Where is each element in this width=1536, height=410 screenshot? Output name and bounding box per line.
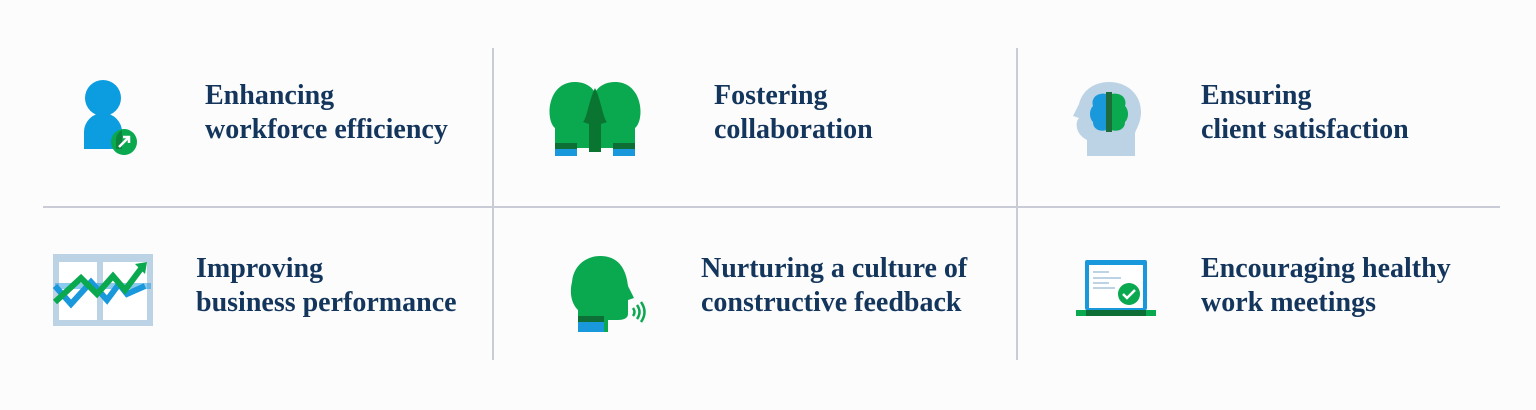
heading: constructive feedback: Nurturing a culture of (701, 253, 967, 284)
heading: constructive feedback (701, 253, 968, 318)
icon: chart (52, 254, 153, 326)
icon: person with arrow (84, 80, 137, 155)
heading: collaboration: collaboration (714, 114, 873, 145)
icon: laptop with check (1076, 260, 1156, 316)
heading: business performance: Improving (196, 253, 323, 284)
heading: collaboration (714, 80, 873, 145)
heading: workforce efficiency (205, 80, 448, 145)
icon: head with brain (1073, 82, 1141, 156)
heading: workforce efficiency: Enhancing (205, 80, 334, 111)
heading: collaboration: Fostering (714, 80, 828, 111)
icon: two heads (550, 82, 640, 156)
heading: client satisfaction: client satisfaction (1201, 114, 1409, 145)
heading: business performance (196, 253, 457, 318)
heading: healthy work meetings: Encouraging healthy (1201, 253, 1451, 284)
heading: constructive feedback: constructive feedback (701, 287, 962, 318)
heading: workforce efficiency: workforce efficiency (205, 114, 448, 145)
icon: speaking head (570, 256, 646, 332)
heading: business performance: business performance (196, 287, 457, 318)
heading: healthy work meetings: work meetings (1201, 287, 1376, 318)
heading: client satisfaction (1201, 80, 1409, 145)
heading: client satisfaction: Ensuring (1201, 80, 1312, 111)
heading: healthy work meetings (1201, 253, 1451, 318)
